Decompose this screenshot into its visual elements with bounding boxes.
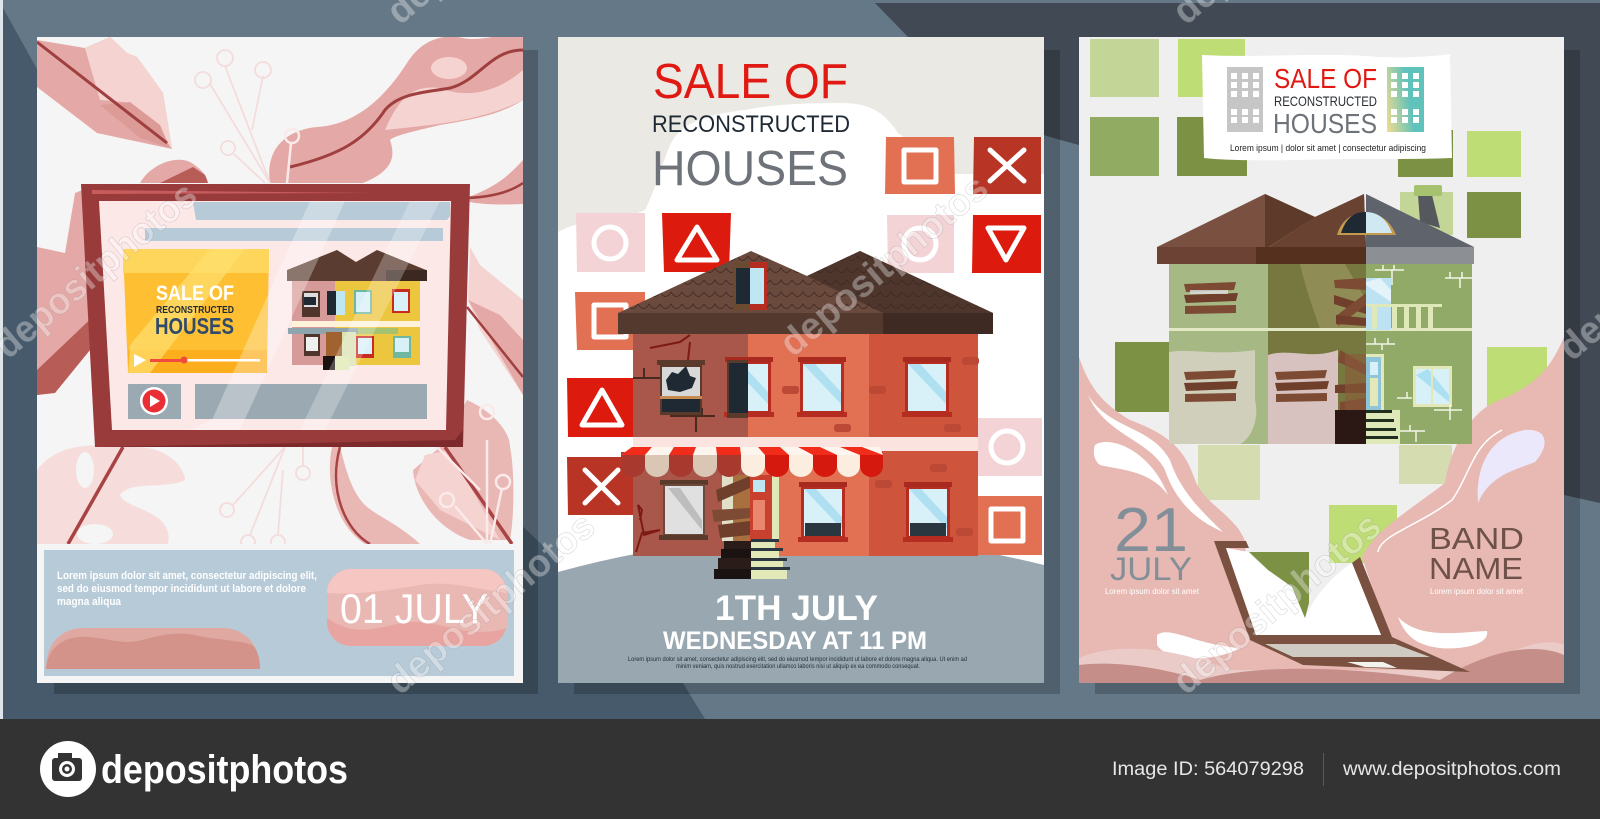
panel: centre poster with red brick house (558, 37, 1044, 683)
band name block (1429, 521, 1524, 596)
heading (652, 55, 850, 196)
weathered house (1157, 194, 1474, 444)
restored windows balcony door (1366, 265, 1472, 444)
chimney (1414, 185, 1442, 228)
heading: RECONSTRUCTED (652, 111, 850, 138)
attic window (1337, 212, 1396, 235)
band name block: BAND (1429, 521, 1524, 556)
information strip (37, 544, 523, 683)
title banner: RECONSTRUCTED (1274, 93, 1377, 109)
title banner (1202, 54, 1452, 160)
body text (57, 570, 317, 608)
date block: JULY (1110, 551, 1192, 587)
green squares (1090, 39, 1547, 563)
boarded windows (1184, 282, 1329, 402)
watermark text overlays: depositphotos (379, 505, 603, 703)
white and lilac accents (1088, 395, 1545, 659)
mound shape (46, 628, 260, 669)
entry steps (714, 539, 790, 579)
body text: magna aliqua (57, 596, 122, 608)
panel: right poster with green house (1079, 37, 1564, 683)
monitor with browser window (81, 184, 470, 447)
laptop (1214, 541, 1470, 672)
image id: Image ID: 564079298 (1112, 759, 1304, 780)
event text (628, 589, 967, 670)
title banner: SALE OF (1274, 63, 1377, 94)
watermark text overlays: depositphotos (772, 167, 996, 365)
footer bar (0, 719, 1600, 819)
video card (123, 249, 269, 373)
heading: HOUSES (652, 142, 848, 196)
watermark text overlays: depositphotos (1165, 505, 1389, 703)
upper windows (633, 357, 952, 432)
band name block: NAME (1429, 551, 1523, 586)
awning (621, 447, 883, 477)
door with planks (712, 475, 779, 541)
cracks and bricks (636, 335, 979, 552)
video card: SALE OF (156, 282, 234, 305)
panel: left poster with monitor (37, 35, 523, 683)
ground (558, 537, 1044, 683)
website: www.depositphotos.com (1342, 759, 1561, 780)
icon: camera logo (40, 741, 96, 797)
dormer window (733, 262, 767, 310)
lower windows (659, 480, 953, 542)
body text: sed do eiusmod tempor incididunt ut labore et dolore (57, 583, 306, 595)
date pill: 01 JULY (340, 585, 488, 632)
date pill (327, 569, 507, 646)
brick house (618, 251, 993, 579)
event text: 1TH JULY (715, 589, 878, 628)
title banner: HOUSES (1273, 108, 1377, 139)
body text: Lorem ipsum dolor sit amet, consectetur adipiscing elit, (57, 570, 317, 582)
heading: SALE OF (653, 55, 848, 109)
botanical leaves background (37, 35, 523, 549)
play button box (128, 384, 181, 419)
title banner: Lorem ipsum | dolor sit amet | consectetur adipiscing (1230, 143, 1426, 154)
event text: Lorem ipsum dolor sit amet, consectetur adipiscing elit, sed do eiusmod tempor incididunt ut labore et dolore magna aliqua. Ut enim ad (628, 656, 967, 663)
event text: minim veniam, quis nostrud exercitation ullamco laboris nisi ut aliquip ex ea commodo consequat. (676, 663, 920, 670)
video card: RECONSTRUCTED (156, 305, 234, 316)
small house illustration (287, 250, 427, 370)
cornice band (633, 437, 978, 451)
date block: 21 (1114, 496, 1188, 565)
date block: Lorem ipsum dolor sit amet (1105, 586, 1200, 596)
date block (1105, 496, 1200, 596)
logo wordmark: depositphotos (101, 748, 348, 792)
shape tiles (567, 137, 1042, 555)
event text: WEDNESDAY AT 11 PM (663, 627, 927, 655)
bottom waves (1079, 642, 1564, 683)
video card: HOUSES (155, 313, 234, 339)
band name block: Lorem ipsum dolor sit amet (1430, 586, 1524, 596)
pink wavy background (1079, 337, 1564, 683)
